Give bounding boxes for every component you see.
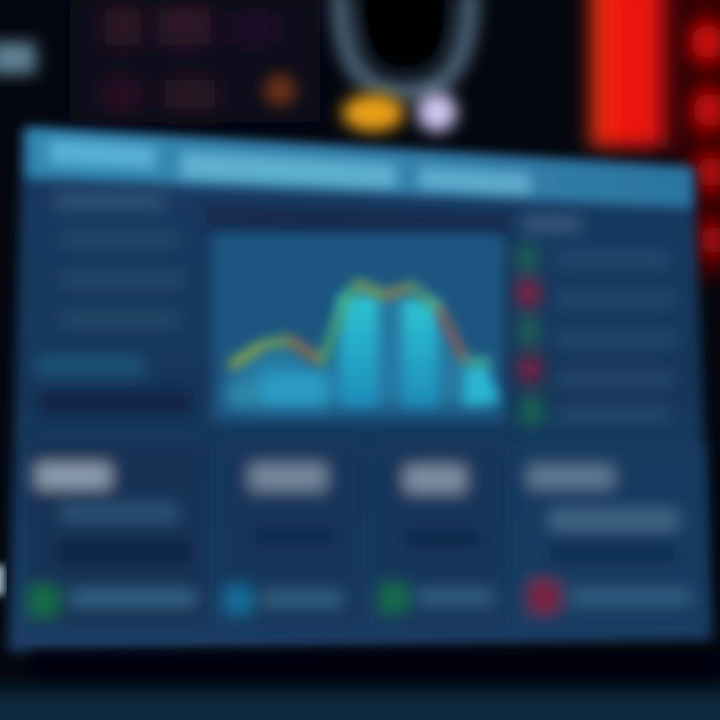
bottom teal surface (0, 690, 720, 720)
stat card one (28, 440, 208, 625)
red glowing panel (590, 0, 720, 280)
top left maroon instrument panel (70, 0, 320, 122)
right column text rows (522, 216, 675, 422)
low cyan bars (228, 372, 328, 406)
left column list (35, 192, 190, 414)
chart panel (212, 234, 504, 422)
dashboard panel (8, 128, 712, 652)
header bar (26, 128, 692, 208)
orange indicator (264, 74, 296, 106)
multicolour line (232, 284, 488, 365)
dark strip under header (205, 205, 510, 235)
tall cyan bars (340, 296, 500, 406)
left edge glint (0, 565, 4, 595)
lavender button (417, 92, 457, 132)
left edge light strip (0, 42, 36, 74)
right column markers (516, 244, 544, 426)
stat card three (375, 445, 505, 625)
stat card four (518, 445, 703, 625)
round gauge ring (340, 0, 470, 92)
area under line (228, 282, 500, 405)
gold button (342, 94, 404, 132)
shadow beneath dashboard (30, 652, 720, 678)
stat card two (222, 445, 362, 625)
